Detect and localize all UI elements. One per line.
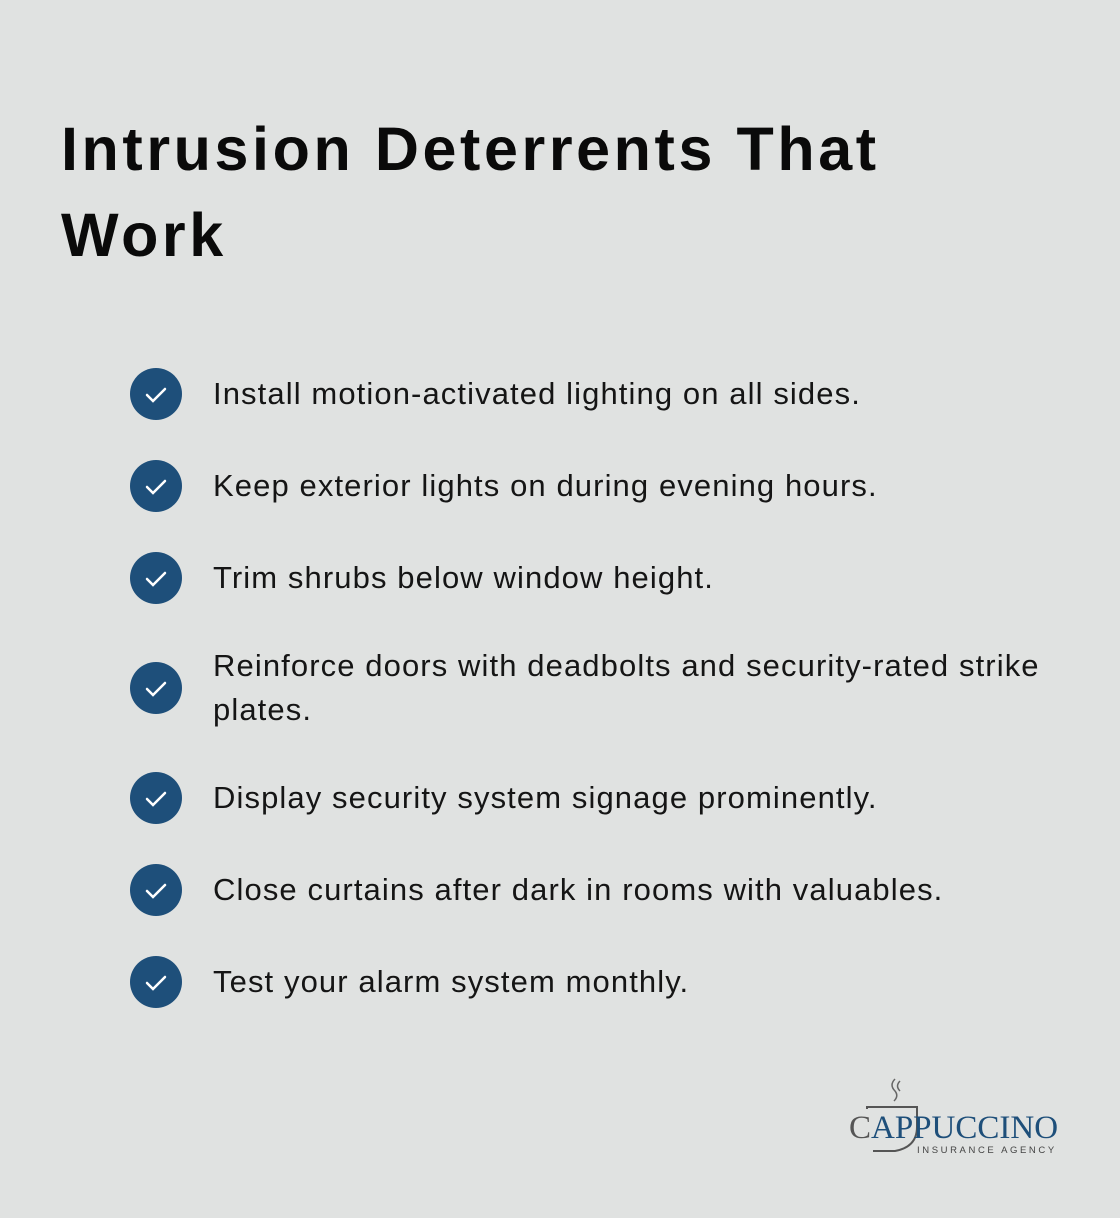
item 2 (130, 460, 878, 512)
item 2: Keep exterior lights on during evening hours. (213, 468, 878, 503)
item 5: Display security system signage prominently. (213, 780, 878, 815)
logo: APPUCCINO (871, 1110, 1058, 1146)
logo: INSURANCE AGENCY (917, 1145, 1057, 1156)
item 5 (130, 772, 878, 824)
logo: C (849, 1110, 871, 1146)
item 7 (130, 956, 689, 1008)
item 6: Close curtains after dark in rooms with valuables. (213, 872, 943, 907)
item 7: Test your alarm system monthly. (213, 964, 689, 999)
item 3: Trim shrubs below window height. (213, 560, 714, 595)
item 1 (130, 368, 861, 420)
item 1: Install motion-activated lighting on all sides. (213, 376, 861, 411)
item 4: Reinforce doors with deadbolts and security-rated strike plates. (213, 648, 1040, 727)
title: Intrusion Deterrents That Work (61, 115, 880, 269)
item 3 (130, 552, 714, 604)
logo (849, 1078, 1058, 1156)
item 6 (130, 864, 943, 916)
